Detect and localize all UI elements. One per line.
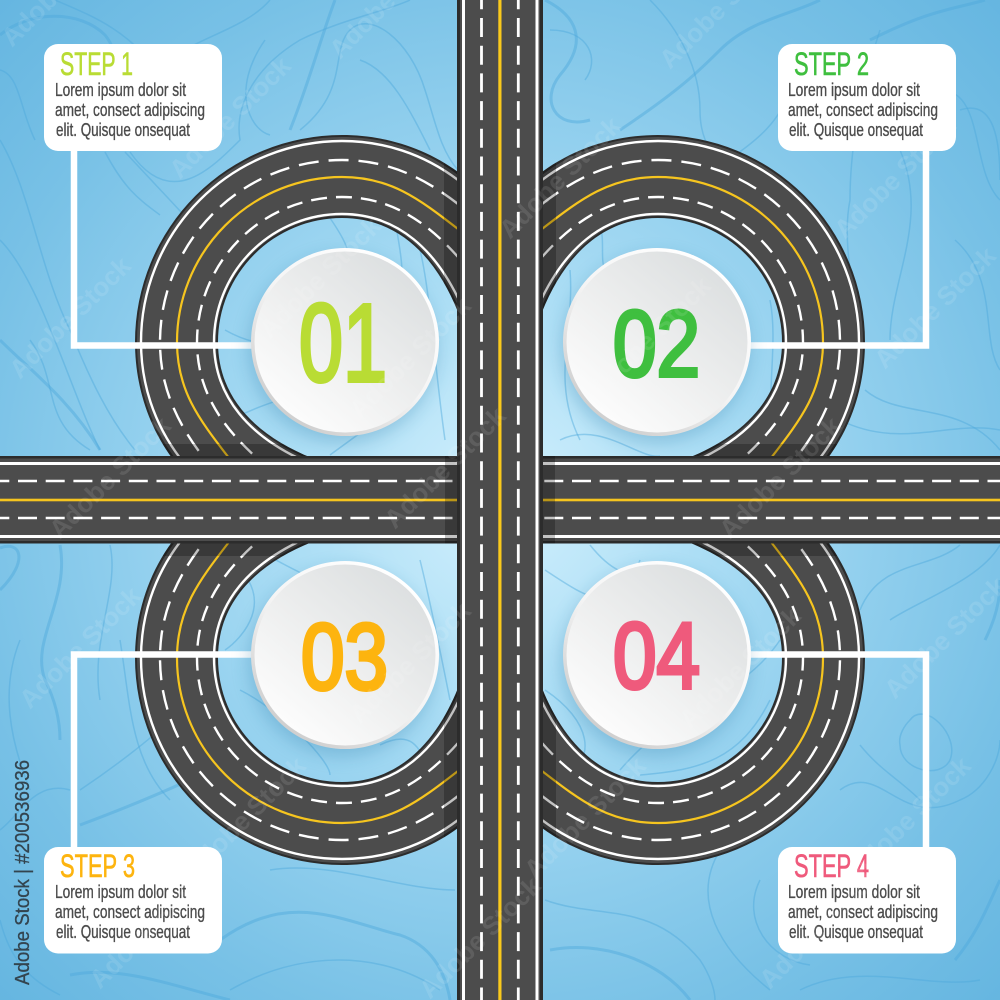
- callout step 3: elit. Quisque onsequat: [56, 921, 190, 942]
- callout step 4: amet, consect adipiscing: [788, 901, 938, 922]
- connector line step 3: [74, 654, 252, 847]
- callout step 1: Lorem ipsum dolor sit: [55, 79, 186, 100]
- callout step 3: [44, 847, 222, 954]
- callout step 1: STEP 1: [60, 46, 133, 82]
- callout step 4: [778, 847, 956, 954]
- callout step 2: elit. Quisque onsequat: [789, 119, 923, 140]
- callout step 3: amet, consect adipiscing: [55, 901, 205, 922]
- watermark pattern: Adobe Stock: [713, 410, 847, 544]
- watermark pattern: Adobe Stock: [828, 110, 962, 244]
- number disc 04: [561, 561, 751, 756]
- watermark pattern: Adobe Stock: [493, 110, 627, 244]
- number disc 01: [249, 248, 439, 443]
- callout step 4: elit. Quisque onsequat: [789, 921, 923, 942]
- watermark pattern: Adobe Stock: [178, 750, 312, 884]
- watermark pattern: Adobe Stock: [43, 410, 177, 544]
- watermark pattern: Adobe Stock: [343, 290, 477, 424]
- connector line step 2: [748, 151, 926, 346]
- callout step 2: Lorem ipsum dolor sit: [788, 79, 920, 100]
- watermark pattern: Adobe Stock: [843, 750, 977, 884]
- watermark pattern: Adobe Stock: [83, 860, 217, 994]
- connector line step 1: [74, 151, 252, 346]
- callout step 2: [778, 44, 956, 151]
- callout step 4: STEP 4: [794, 848, 869, 884]
- callout step 2: STEP 2: [794, 46, 869, 82]
- stock id caption: Adobe Stock | #200536936: [12, 760, 34, 985]
- callout step 1: [44, 44, 222, 151]
- number disc 02: [561, 248, 751, 443]
- number disc 04: 04: [613, 603, 700, 708]
- watermark pattern: Adobe Stock: [518, 750, 652, 884]
- watermark pattern: Adobe Stock: [583, 270, 717, 404]
- callout step 3: STEP 3: [60, 848, 135, 884]
- number disc 03: 03: [301, 604, 388, 709]
- road loop 3 (bottom left): [130, 542, 458, 870]
- vertical highway: [457, 0, 543, 1000]
- watermark pattern: Adobe Stock: [868, 240, 1000, 374]
- callout step 4: Lorem ipsum dolor sit: [788, 881, 920, 902]
- watermark pattern: Adobe Stock: [343, 595, 477, 729]
- callout step 1: amet, consect adipiscing: [55, 99, 205, 120]
- number disc 02: 02: [613, 291, 700, 396]
- road loop 1 (top left): [130, 130, 458, 458]
- watermark pattern: Adobe Stock: [673, 600, 807, 734]
- number disc 01: 01: [299, 282, 387, 405]
- callout step 3: Lorem ipsum dolor sit: [55, 881, 186, 902]
- number disc 03: [249, 561, 439, 756]
- callout step 1: elit. Quisque onsequat: [56, 119, 190, 140]
- watermark pattern: Adobe Stock: [3, 250, 137, 384]
- connector line step 4: [748, 654, 926, 847]
- road loop 4 (bottom right): [542, 542, 870, 870]
- watermark pattern: Adobe Stock: [13, 580, 147, 714]
- road loop 2 (top right): [542, 130, 870, 458]
- watermark pattern: Adobe Stock: [253, 210, 387, 344]
- callout step 2: amet, consect adipiscing: [788, 99, 938, 120]
- watermark pattern: Adobe Stock: [378, 400, 512, 534]
- watermark pattern: Adobe Stock: [163, 50, 297, 184]
- watermark pattern: Adobe Stock: [753, 860, 887, 994]
- horizontal highway: [0, 456, 1000, 544]
